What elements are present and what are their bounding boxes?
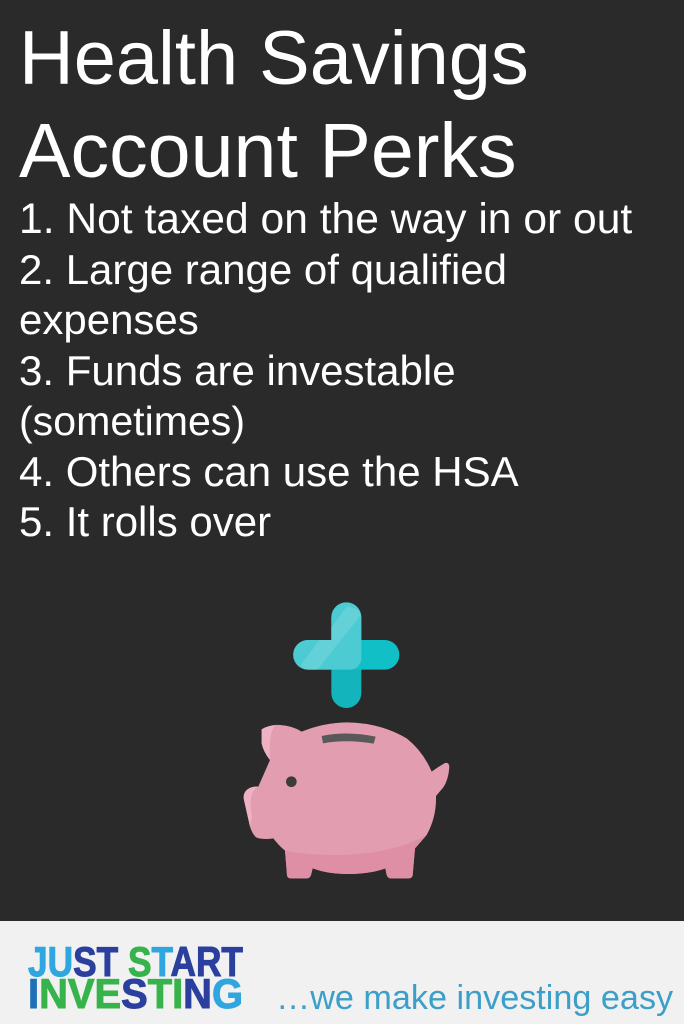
logo: Just Start Investing xyxy=(28,942,243,1014)
list of perks xyxy=(19,195,632,545)
title: Health Savings xyxy=(19,16,529,101)
list of perks: 1. Not taxed on the way in or out xyxy=(19,195,632,243)
icon: medical plus xyxy=(293,602,400,708)
list of perks: 4. Others can use the HSA xyxy=(19,448,519,494)
icon: piggy bank xyxy=(244,722,450,878)
list of perks: 3. Funds are investable xyxy=(19,346,456,394)
list of perks: 2. Large range of qualified xyxy=(19,246,507,292)
list of perks: (sometimes) xyxy=(19,398,245,444)
list of perks: expenses xyxy=(19,296,199,343)
list of perks: 5. It rolls over xyxy=(19,498,271,545)
title xyxy=(19,16,529,194)
title: Account Perks xyxy=(19,108,517,194)
tagline: …we make investing easy xyxy=(276,979,673,1017)
footer band xyxy=(0,921,684,1024)
